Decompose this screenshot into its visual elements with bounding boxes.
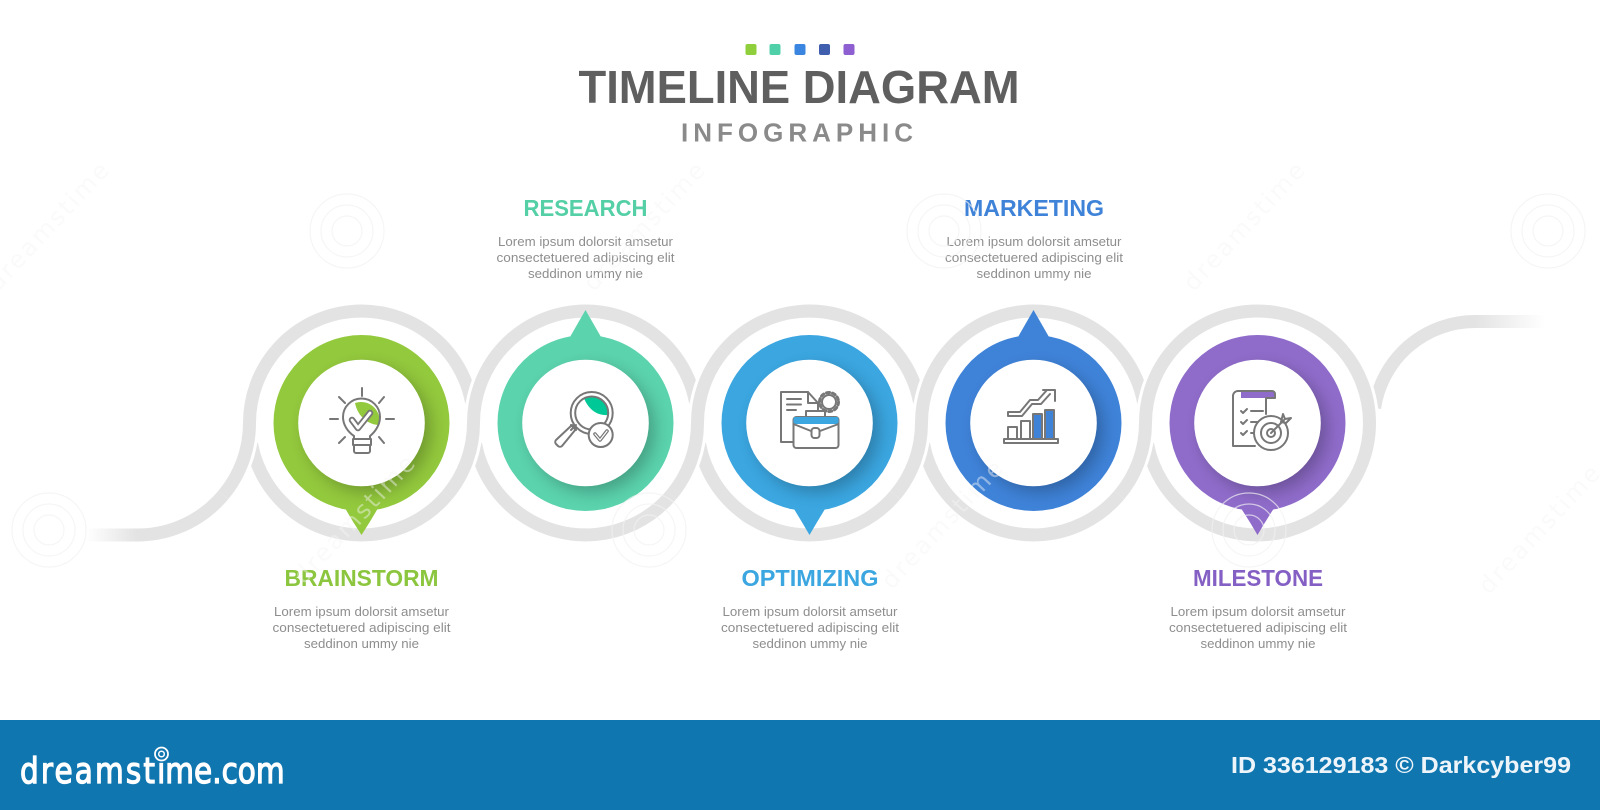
- text: brainstorm description: consectetuered adipiscing elit: [272, 621, 451, 635]
- text: milestone description: consectetuered adipiscing elit: [1169, 621, 1348, 635]
- text: milestone description: [1169, 605, 1348, 651]
- text: marketing description: consectetuered adipiscing elit: [945, 251, 1124, 265]
- icon: growth chart: [1004, 390, 1058, 443]
- timeline track: [86, 311, 1545, 535]
- step 3: optimizing: [721, 335, 900, 651]
- watermark: stock overlay: dreamstime: [876, 455, 1009, 594]
- colour squares: [746, 44, 854, 55]
- heading: brainstorm: BRAINSTORM: [284, 565, 438, 591]
- heading: research: RESEARCH: [524, 195, 648, 221]
- title: TIMELINE DIAGRAM: [578, 61, 1020, 113]
- text: brainstorm description: seddinon ummy nie: [304, 637, 419, 651]
- heading: marketing: MARKETING: [964, 195, 1104, 221]
- text: research description: consectetuered adipiscing elit: [496, 251, 675, 265]
- text: optimizing description: consectetuered adipiscing elit: [721, 621, 900, 635]
- image id and credit: ID 336129183 © Darkcyber99: [1231, 752, 1571, 778]
- ring: teal: [498, 310, 674, 511]
- text: brainstorm description: [272, 605, 451, 651]
- text: marketing description: Lorem ipsum dolorsit amsetur: [946, 235, 1122, 249]
- text: research description: Lorem ipsum dolorsit amsetur: [498, 235, 673, 249]
- icon: magnifier: [555, 392, 613, 447]
- text: brainstorm description: Lorem ipsum dolorsit amsetur: [274, 605, 449, 619]
- watermark: stock overlay: dreamstime: [578, 157, 711, 296]
- watermark: stock overlay: dreamstime: [1178, 157, 1311, 296]
- text: research description: [496, 235, 675, 281]
- step 4: marketing: [945, 195, 1124, 511]
- footer banner: [0, 720, 1600, 810]
- watermark: stock overlay: dreamstime: [288, 450, 421, 589]
- step 1: brainstorm: [272, 335, 451, 651]
- icon: light bulb: [330, 388, 394, 453]
- text: research description: seddinon ummy nie: [528, 267, 643, 281]
- icon: documents and briefcase: [781, 392, 839, 448]
- ring: blue: [946, 310, 1122, 511]
- heading: optimizing: OPTIMIZING: [742, 565, 878, 591]
- ring: purple: [1170, 335, 1346, 535]
- watermark: stock overlay: [0, 157, 1600, 599]
- text: milestone description: Lorem ipsum dolorsit amsetur: [1170, 605, 1346, 619]
- step 5: milestone: [1169, 335, 1348, 651]
- subtitle: INFOGRAPHIC: [681, 118, 913, 148]
- logo: dreamstime.com: dreamstime.com: [20, 749, 285, 792]
- ring: sky blue: [722, 335, 898, 535]
- text: milestone description: seddinon ummy nie: [1200, 637, 1316, 651]
- ring: green: [274, 335, 450, 535]
- text: optimizing description: [721, 605, 900, 651]
- text: marketing description: seddinon ummy nie: [976, 267, 1092, 281]
- heading: milestone: MILESTONE: [1193, 565, 1323, 591]
- text: optimizing description: seddinon ummy nie: [752, 637, 868, 651]
- text: marketing description: [945, 235, 1124, 281]
- text: optimizing description: Lorem ipsum dolorsit amsetur: [722, 605, 898, 619]
- icon: checklist and target: [1233, 391, 1291, 450]
- step 2: research: [496, 195, 675, 511]
